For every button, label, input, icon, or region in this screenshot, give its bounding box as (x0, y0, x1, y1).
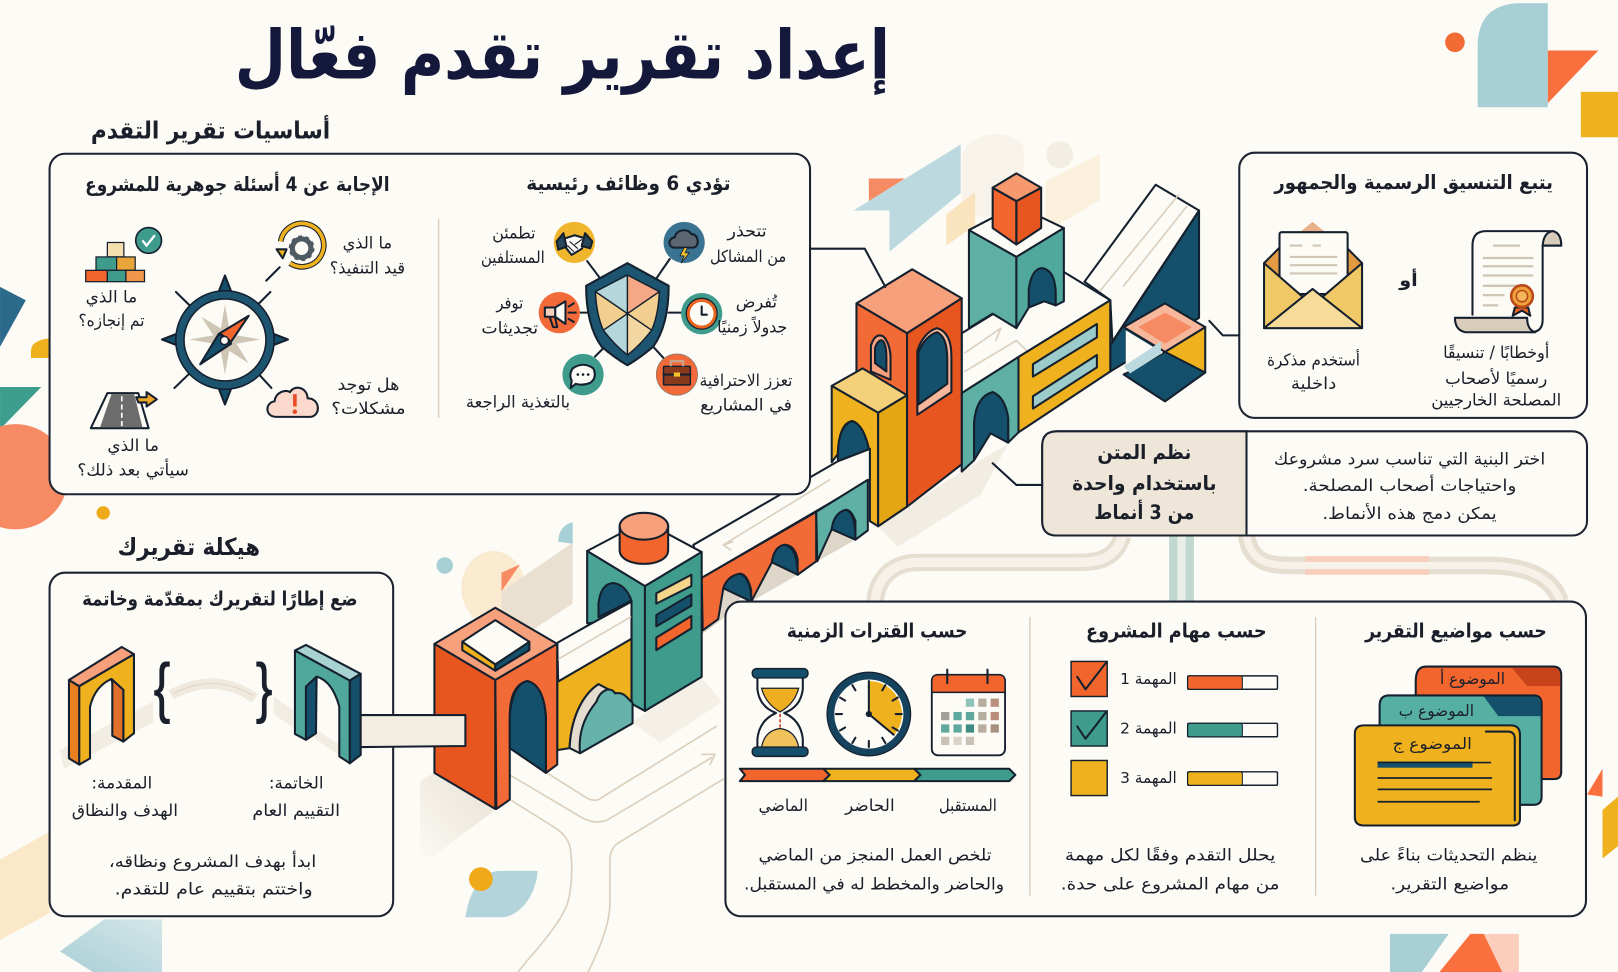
heading: by project tasks: حسب مهام المشروع (1086, 620, 1267, 643)
icon: gear with arrow (277, 223, 324, 267)
text: structure body: ابدأ بهدف المشروع ونظاقه، (109, 850, 316, 872)
labels: format options: أستخدم مذكرة (1267, 348, 1360, 370)
isometric illustration: road link and yellow cloud arch (556, 602, 633, 753)
orange cube (993, 173, 1041, 201)
panel: three patterns (725, 602, 1586, 916)
isometric illustration: upper teal tower (969, 173, 1064, 328)
icon: orange intro arch (69, 647, 134, 765)
heading: format and audience: يتبع التنسيق الرسمية والجمهور (1273, 171, 1553, 194)
labels: six functions: تعزز الاحترافية (700, 371, 793, 391)
text: choose the structure (1274, 449, 1545, 524)
labels: six functions: تتحذر (726, 221, 767, 241)
labels: six functions: في المشاريع (700, 396, 792, 416)
text: or: أو (1398, 269, 1418, 291)
heading: by report topics: حسب مواضيع التقرير (1364, 620, 1547, 643)
icon: compass (162, 267, 288, 404)
icon: road with arrow (91, 392, 157, 428)
labels: six functions: تطمئن (492, 223, 536, 242)
text: choose the structure: اختر البنية التي تناسب سرد مشروعك (1274, 449, 1545, 469)
labels: four questions: ما الذي (343, 234, 392, 254)
labels: format options: رسميًا لأصحاب (1445, 368, 1547, 389)
text: organise the body (1072, 441, 1217, 524)
text: tasks body: يحلل التقدم وفقًا لكل مهمة (1065, 846, 1276, 866)
chart: task one: المهمة 1 (1120, 670, 1177, 689)
folder B: الموضوع ب (1399, 702, 1474, 721)
labels: four questions: سيأتي بعد ذلك؟ (77, 459, 189, 481)
icon: storm circle (664, 222, 705, 263)
icon: shield with six functions (580, 259, 681, 365)
soft shadows under buildings (420, 444, 1008, 856)
icon: blocks with check (86, 228, 162, 282)
labels: six functions: توفر (495, 294, 524, 314)
icon: chat circle (562, 354, 604, 395)
title: إعداد تقرير تقدم فعّال (235, 16, 890, 95)
labels: six functions: المستلفين (481, 248, 545, 267)
text: organise the body: باستخدام واحدة (1072, 472, 1217, 495)
connecting pipes (875, 536, 1560, 602)
decorative shapes: left edge (0, 287, 162, 972)
labels: six functions: بالتغذية الراجعة (466, 393, 570, 413)
icon: topic folders (1355, 667, 1561, 825)
panel: report structure (50, 573, 393, 916)
icon: clock circle (681, 293, 722, 334)
icon: handshake circle (554, 222, 595, 263)
arch bridge curve (60, 684, 341, 769)
folder B (1380, 695, 1542, 805)
panel: format and audience (1239, 153, 1587, 418)
isometric illustration: lower road and arcade (693, 449, 870, 635)
icon: clock (827, 672, 911, 756)
decorative shapes: behind upper towers (853, 134, 1100, 252)
chart: task two (1071, 711, 1277, 746)
icon: briefcase circle (656, 354, 698, 395)
icon: formal scroll (1455, 231, 1561, 332)
labels: six functions: جدولاً زمنيًا (717, 316, 787, 337)
isometric illustration: yellow tower (832, 368, 907, 526)
isometric illustration: big orange tower (856, 269, 962, 526)
labels: conclusion and introduction: الهدف والنظاق (72, 801, 178, 821)
heading: report structure: هيكلة تقريرك (118, 533, 260, 561)
folder A: الموضوع أ (1440, 668, 1505, 689)
text: topics body: ينظم التحديثات بناءً على (1360, 846, 1538, 865)
panel: report basics (50, 154, 810, 494)
icon: megaphone circle (539, 292, 580, 333)
icon: left brace: { (154, 650, 170, 724)
text: choose the structure: يمكن دمج هذه الأنماط. (1322, 503, 1497, 524)
chart: timeline arrow (740, 769, 1015, 781)
labels: four questions: ما الذي (107, 436, 159, 456)
labels: timeline: المستقبل (939, 796, 997, 815)
heading: six functions: تؤدي 6 وظائف رئيسية (526, 172, 731, 196)
labels: four questions: ما الذي (86, 287, 137, 307)
text: time body: تلخص العمل المنجز من الماضي (758, 846, 992, 866)
labels: timeline: الماضي (758, 796, 808, 816)
labels: conclusion and introduction: المقدمة: (91, 773, 152, 792)
icon: hourglass (752, 669, 808, 756)
isometric illustration: teal tower with cylinder (587, 513, 702, 711)
chart: task three: المهمة 3 (1120, 769, 1177, 788)
folder C: الموضوع ج (1393, 735, 1472, 754)
labels: four questions: هل توجد (337, 375, 399, 395)
text: time body (744, 846, 1004, 894)
beam linking panel to tower (361, 715, 465, 747)
shadow under arches (702, 529, 855, 635)
labels: format options: أوخطابًا / تنسيقًا (1443, 341, 1549, 363)
labels: four questions (77, 234, 406, 481)
isometric illustration: ramp and upper deck (962, 185, 1199, 472)
chart: task one (1071, 661, 1277, 696)
labels: four questions: تم إنجازه؟ (78, 311, 145, 331)
icon: calendar (932, 670, 1005, 755)
labels: conclusion and introduction (72, 773, 340, 821)
heading: frame the report: ضع إطارًا لتقريرك بمقدّمة وخاتمة (82, 588, 358, 611)
panel: text systems (1042, 431, 1587, 536)
text: tasks body (1061, 846, 1280, 894)
isometric illustration: small cube (1124, 303, 1205, 401)
labels: six functions: تجديثات (481, 318, 539, 337)
icon: envelope memo (1264, 222, 1362, 328)
road guide lines (510, 726, 723, 972)
text: organise the body: من 3 أنماط (1094, 500, 1194, 524)
text: topics body (1360, 846, 1538, 894)
labels: timeline: الحاضر (844, 796, 895, 816)
folder A (1416, 667, 1561, 779)
icon: right brace: } (256, 650, 272, 724)
isometric illustration: front orange tower (434, 608, 557, 809)
icon: teal closing arch (295, 645, 361, 763)
labels: six functions: من المشاكل (710, 247, 786, 266)
road deck (693, 449, 870, 578)
text: choose the structure: واحتياجات أصحاب المصلحة. (1303, 474, 1516, 496)
labels: six functions (466, 221, 793, 416)
icon: cloud alert (267, 388, 318, 417)
chart: task three (1071, 760, 1277, 796)
labels: six functions: تُفرض (736, 292, 778, 312)
labels: conclusion and introduction: التقييم العام (252, 801, 340, 820)
text: tasks body: من مهام المشروع على حدة. (1061, 874, 1280, 894)
arcade: orange section (702, 512, 816, 630)
text: structure body (109, 850, 316, 900)
heading: four questions: الإجابة عن 4 أسئلة جوهرية للمشروع (85, 172, 390, 196)
folder C (1355, 725, 1520, 825)
connector lines (810, 249, 1239, 485)
labels: conclusion and introduction: الخاتمة: (269, 773, 324, 792)
text: organise the body: نظم المتن (1097, 441, 1191, 464)
arcade: teal section (816, 480, 868, 561)
decorative shapes: top right (1445, 3, 1618, 137)
decorative shapes: centre and bottom (437, 522, 1618, 972)
labels: timeline (758, 796, 997, 816)
labels: four questions: قيد التنفيذ؟ (330, 258, 405, 277)
text: time body: والحاضر والمخطط له في المستقبل. (744, 874, 1004, 894)
labels: format options (1267, 341, 1561, 411)
labels: four questions: مشكلات؟ (331, 399, 406, 418)
chart: task two: المهمة 2 (1120, 720, 1177, 739)
text: topics body: مواضيع التقرير. (1390, 874, 1509, 894)
labels: format options: داخلية (1291, 374, 1336, 393)
heading: report basics: أساسيات تقرير التقدم (91, 114, 330, 144)
labels: format options: المصلحة الخارجيين (1431, 391, 1561, 411)
heading: by time periods: حسب القترات الزمنية (787, 620, 967, 643)
text: structure body: واختتم بتقييم عام للتقدم. (115, 880, 313, 900)
